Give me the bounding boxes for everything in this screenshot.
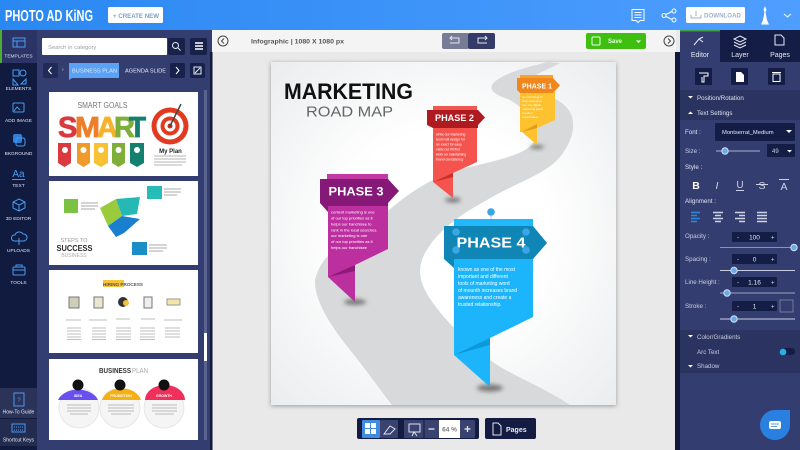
section headers: Text Settings [697, 110, 732, 117]
icon: next [664, 36, 674, 46]
stroke control: + [771, 304, 775, 310]
template: business plan: PLAN [132, 368, 148, 375]
spacing control: + [771, 258, 775, 264]
template: business plan [49, 359, 198, 440]
phase 4 text: known as one of the most [458, 267, 516, 273]
search box: Search in category [48, 45, 96, 51]
template: smart goals [49, 92, 198, 176]
stroke control [685, 300, 795, 322]
background item: BKGROUND [5, 151, 33, 157]
promotion circle [100, 380, 141, 428]
phase 3 text: rank in the local searches. [331, 228, 377, 232]
winding road [315, 62, 573, 405]
zoom controls: 64 % [442, 426, 457, 434]
title: MARKETING [284, 79, 413, 104]
size row [685, 144, 795, 157]
opacity control [685, 232, 797, 251]
3d editor item: 3D EDITOR [6, 216, 32, 222]
phase 4 text: awareness and create a [458, 295, 512, 301]
uploads item [7, 232, 30, 254]
text item [12, 169, 25, 189]
section headers [680, 90, 800, 120]
pin: phase 1: PHASE 1 [522, 82, 552, 90]
how-to guide item: How-To Guide [3, 410, 35, 416]
save button: Save [608, 39, 623, 45]
pin: phase 2: PHASE 2 [435, 113, 474, 123]
how-to guide item [0, 388, 37, 418]
growth circle: GROWTH [156, 394, 172, 398]
create new button: + CREATE NEW [113, 13, 160, 20]
smart letters [58, 112, 146, 144]
color and arc section [680, 330, 800, 373]
elements item [6, 70, 31, 92]
phase 1 text: creation [522, 111, 533, 115]
active templates item: TEMPLATES [4, 54, 33, 60]
phase 1 text: organization [522, 115, 539, 119]
right settings panel [680, 30, 800, 450]
template: smart goals: SMART GOALS [78, 101, 128, 110]
add image item [5, 103, 32, 124]
template: business plan: BUSINESS [99, 368, 131, 375]
phase 4 text: of mounth increases brand [458, 288, 517, 294]
opacity control: - [737, 236, 739, 242]
text item: Aa [12, 169, 25, 180]
opacity control: 100 [749, 234, 760, 242]
tab: layer: Layer [731, 52, 749, 59]
line height control: Line Height : [685, 279, 720, 286]
template: steps to success [49, 181, 198, 265]
phase 4 text: trusted relationship. [458, 302, 502, 308]
left icon rail [0, 30, 37, 450]
dark separators [210, 52, 680, 450]
phase 3 text: content marketing is one [331, 210, 375, 214]
template: hiring process: HIRING PROCESS [103, 282, 143, 287]
scrollbar [204, 90, 207, 440]
redo button [468, 33, 495, 49]
phase 3 text: helps our franchisee [331, 245, 368, 250]
template: hiring process [49, 270, 198, 353]
alignment row: Alignment : [685, 198, 716, 205]
pin: phase 4: PHASE 4 [456, 234, 526, 252]
idea circle [58, 380, 99, 428]
elements item: ELEMENTS [6, 86, 31, 92]
opacity control: + [771, 236, 775, 242]
tab: pages: Pages [770, 52, 790, 59]
stroke control: - [737, 304, 739, 310]
active templates item [0, 30, 37, 63]
style row: S [758, 180, 766, 192]
spacing control: - [737, 258, 739, 264]
icon: user trophy [761, 6, 769, 24]
line height control: + [771, 280, 775, 286]
smart letters: M [75, 112, 100, 144]
download button: DOWNLOAD [704, 12, 741, 20]
size row: Size : [685, 148, 701, 155]
line height control: - [737, 280, 739, 286]
section headers: Position/Rotation [697, 95, 744, 102]
phase 4 text: tools of marketing word [458, 281, 510, 287]
phase 2 text: visits our fill first [436, 148, 460, 152]
icon: chat bubble [760, 410, 790, 440]
undo button [442, 33, 469, 49]
line height control: 1.16 [748, 280, 761, 286]
bottom zoom toolbar [357, 418, 536, 439]
pin: phase 1 [517, 75, 560, 149]
add image item: ADD IMAGE [5, 118, 32, 124]
create new button [108, 7, 163, 23]
phase 3 text: of our top priorities as it [331, 216, 373, 220]
icon: chevron [784, 14, 791, 17]
template: smart goals: My Plan [159, 149, 182, 155]
stroke control: 1 [753, 304, 757, 310]
download button [686, 7, 745, 23]
pin: phase 3 [320, 174, 399, 305]
color and arc section: Color/Gradients [697, 334, 740, 341]
phase 3 text: of our top priorities as it [331, 239, 373, 244]
canvas toolbar [212, 30, 676, 52]
canvas workspace background [212, 52, 676, 450]
top header bar [0, 0, 800, 30]
phase 2 text: an exact for easy [436, 142, 462, 146]
font row: Font : [685, 129, 701, 136]
tools item [10, 265, 27, 286]
eraser button [380, 420, 398, 438]
save button [586, 33, 646, 49]
smart letters: S [58, 112, 77, 144]
color and arc section: Shadow [697, 363, 720, 370]
idea circle: IDEA [74, 394, 83, 398]
phase 3 text: helps our franchisee to [331, 222, 372, 226]
template: steps to success: STEPS TO [60, 238, 88, 244]
phase 1 text: marketing plans [522, 107, 544, 111]
promotion circle: PROMOTION [110, 394, 132, 398]
font row [685, 123, 795, 141]
icon: back [218, 36, 228, 46]
title: ROAD MAP [306, 104, 393, 120]
pin: phase 3: PHASE 3 [328, 184, 384, 198]
growth circle [144, 380, 185, 428]
smart letters: A [97, 112, 118, 144]
style row: I [716, 180, 719, 192]
panel tabs [680, 30, 800, 62]
style row: B [692, 180, 700, 192]
background item [5, 134, 33, 157]
icon: comment [632, 10, 644, 22]
stroke control: Stroke : [685, 303, 707, 310]
icon: list button [190, 38, 207, 55]
phase 3 text: our marketing is one [331, 233, 368, 238]
color and arc section: Arc Text [697, 349, 720, 356]
tab: editor: Editor [691, 52, 710, 59]
pin: phase 4 [444, 208, 547, 392]
grid toggle [362, 420, 380, 438]
cube [100, 197, 140, 237]
category tabs: › [62, 67, 64, 73]
pages button [485, 418, 536, 439]
shortcut keys item [0, 419, 37, 446]
shortcut keys item: Shortcut Keys [3, 438, 35, 444]
smart letters: T [129, 112, 146, 144]
spacing control: Spacing : [685, 256, 711, 263]
search box [42, 38, 185, 55]
title [284, 79, 413, 120]
phase 2 text: work on maintaining [436, 152, 466, 156]
style row: Style : [685, 164, 702, 171]
process columns [66, 319, 182, 340]
uploads item: UPLOADS [7, 248, 30, 254]
phase 1 text: turn our digital [522, 103, 541, 107]
document size label: Infographic | 1080 X 1080 px [251, 38, 344, 46]
icon: share [662, 9, 676, 22]
template: steps to success: SUCCESS [56, 244, 93, 253]
pages button: Pages [506, 427, 527, 434]
infographic artboard [271, 62, 616, 405]
action buttons [695, 68, 785, 85]
phase 1 text: no marketing to [522, 95, 543, 99]
template: steps to success: BUSINESS [61, 253, 87, 259]
category tabs: BUSINESS PLAN [72, 68, 117, 74]
smart letters: R [114, 112, 135, 144]
logo: PHOTO AD KiNG [5, 8, 93, 25]
3d editor item [6, 199, 32, 222]
line height control [685, 277, 795, 296]
goal tags [58, 143, 144, 167]
alignment row [685, 198, 767, 222]
zoom controls [404, 420, 475, 438]
phase 4 text: important and different [458, 274, 509, 280]
spacing control: 0 [753, 256, 757, 264]
phase 2 text: team will design for [436, 138, 466, 142]
font row: Montserrat_Medium [722, 130, 774, 136]
how-to guide item: ? [17, 398, 21, 404]
style row: A [780, 181, 788, 193]
phase 2 text: while our marketing [436, 132, 466, 136]
opacity control: Opacity : [685, 233, 710, 240]
selection handles [452, 208, 530, 254]
size row: 49 [772, 149, 779, 155]
process icons [69, 297, 180, 308]
pin: phase 2 [427, 106, 485, 202]
style row: U [736, 180, 744, 191]
left template panel [37, 30, 212, 450]
phase 1 text: help attempt to [522, 99, 542, 103]
icon: target [152, 104, 188, 144]
phase 2 text: brand consistency [436, 158, 464, 162]
category tabs [43, 63, 205, 80]
style row [685, 164, 789, 193]
tools item: TOOLS [10, 280, 27, 286]
spacing control [685, 254, 795, 274]
text item: TEXT [12, 183, 25, 189]
category tabs: AGENDA SLIDE [125, 68, 166, 74]
